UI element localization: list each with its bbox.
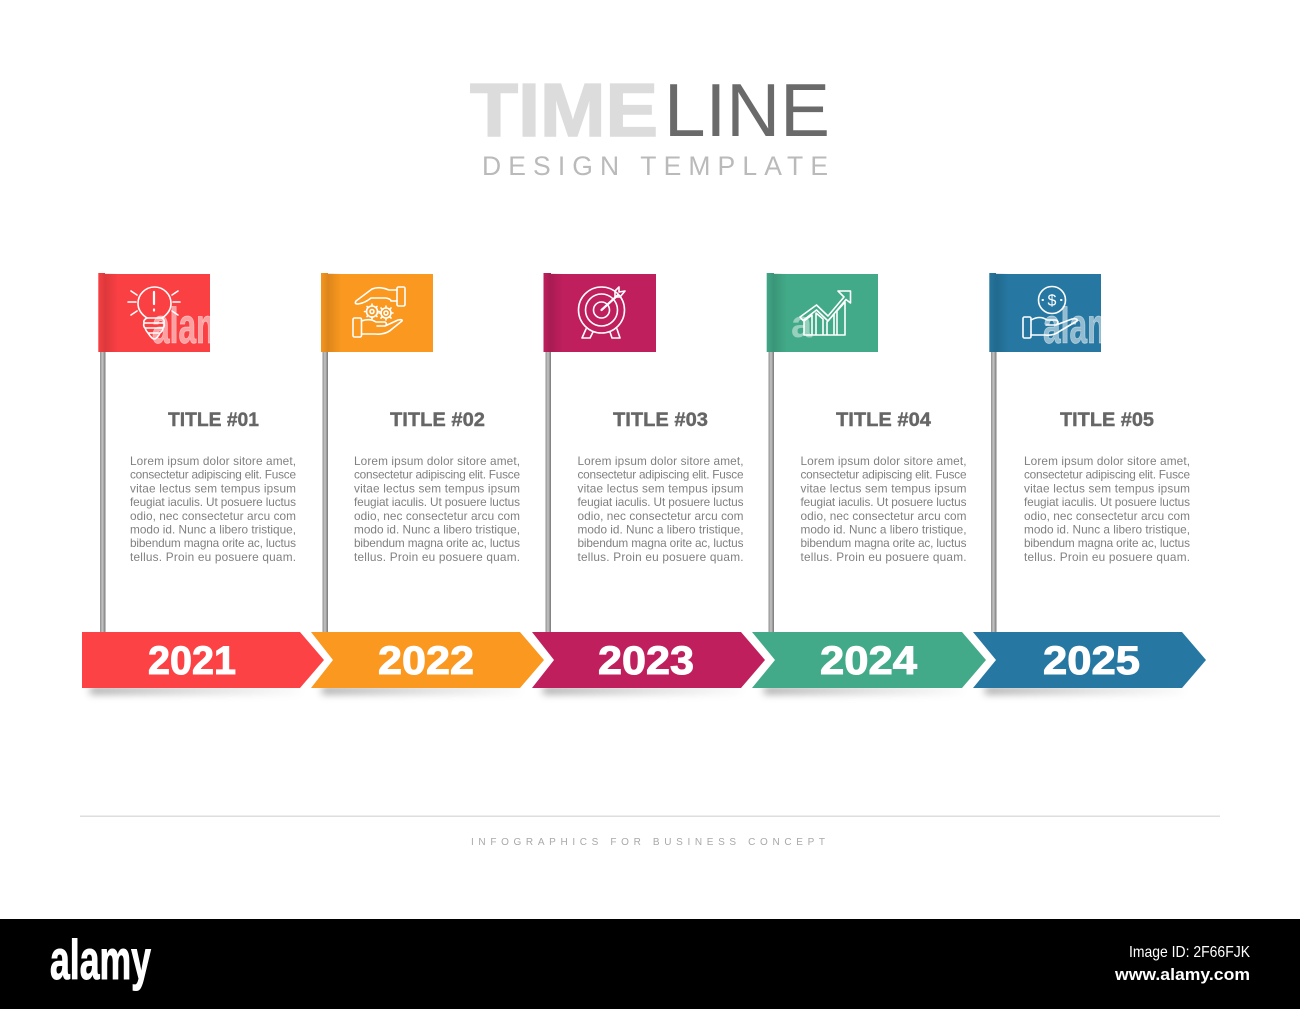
flag 2023 <box>544 273 656 352</box>
arrow: 2022: 2022 <box>378 639 474 683</box>
arrow: 2022 <box>311 632 544 688</box>
text block 02: vitae lectus sem tempus ipsum <box>354 481 520 495</box>
text block 02: tellus. Proin eu posuere quam. <box>354 550 520 564</box>
text block 04: vitae lectus sem tempus ipsum <box>800 481 967 495</box>
arrow: 2023: 2023 <box>598 639 694 683</box>
text block 02: consectetur adipiscing elit. Fusce <box>354 468 520 482</box>
text block 01: modo id. Nunc a libero tristique, <box>130 522 296 536</box>
text block 04: bibendum magna orite ac, luctus <box>800 536 967 550</box>
text block 04: odio, nec consectetur arcu com <box>800 509 967 523</box>
watermark fragment: alamy <box>1043 298 1133 354</box>
text block 03: vitae lectus sem tempus ipsum <box>578 481 744 495</box>
panel: 2024 <box>767 273 967 633</box>
text block 05: bibendum magna orite ac, luctus <box>1024 536 1190 550</box>
text block 02: odio, nec consectetur arcu com <box>354 509 520 523</box>
title: LINE <box>664 68 830 152</box>
text block 03: Lorem ipsum dolor sitore amet, <box>578 454 744 468</box>
text block 05: consectetur adipiscing elit. Fusce <box>1024 468 1190 482</box>
text block 01: consectetur adipiscing elit. Fusce <box>130 468 296 482</box>
text block 02: feugiat iaculis. Ut posuere luctus <box>354 495 520 509</box>
panel: 2021 <box>98 273 296 633</box>
title <box>470 68 830 152</box>
pole 2025 <box>991 350 996 633</box>
arrow: 2021 <box>82 632 324 688</box>
text block 03: feugiat iaculis. Ut posuere luctus <box>578 495 744 509</box>
website: www.alamy.com <box>1114 965 1250 984</box>
pole 2023 <box>546 350 551 633</box>
text block 02: Lorem ipsum dolor sitore amet, <box>354 454 520 468</box>
arrow: 2024: 2024 <box>820 639 918 683</box>
text block 04: tellus. Proin eu posuere quam. <box>800 550 966 564</box>
text block 02 <box>354 454 520 564</box>
footer caption: INFOGRAPHICS FOR BUSINESS CONCEPT <box>471 837 825 848</box>
watermark fragment: alamy <box>152 298 242 354</box>
text block 04 <box>800 454 967 564</box>
text block 05: vitae lectus sem tempus ipsum <box>1024 481 1190 495</box>
panel: 2023 <box>544 273 744 633</box>
footer bar <box>0 919 1300 1009</box>
title #05: TITLE #05 <box>1060 409 1154 431</box>
image id: Image ID: 2F66FJK <box>1129 944 1250 961</box>
text block 01: odio, nec consectetur arcu com <box>130 509 296 523</box>
text block 05: modo id. Nunc a libero tristique, <box>1024 522 1190 536</box>
icon: hands and gears <box>353 287 405 337</box>
text block 05: feugiat iaculis. Ut posuere luctus <box>1024 495 1190 509</box>
text block 03: bibendum magna orite ac, luctus <box>578 536 744 550</box>
text block 04: feugiat iaculis. Ut posuere luctus <box>800 495 967 509</box>
text block 03: consectetur adipiscing elit. Fusce <box>578 468 744 482</box>
arrow: 2021: 2021 <box>148 639 236 683</box>
text block 03: modo id. Nunc a libero tristique, <box>578 522 744 536</box>
flag 2022 <box>321 273 433 352</box>
text block 01: tellus. Proin eu posuere quam. <box>130 550 296 564</box>
text block 01: feugiat iaculis. Ut posuere luctus <box>130 495 296 509</box>
text block 01 <box>130 454 296 564</box>
title: TIME <box>470 68 658 152</box>
pole 2024 <box>768 350 774 633</box>
alamy logo: alamy <box>50 928 151 991</box>
text block 04: consectetur adipiscing elit. Fusce <box>800 468 967 482</box>
pole 2021 <box>100 350 106 633</box>
flag 2024 <box>767 273 878 352</box>
pole 2022 <box>322 350 328 633</box>
text block 03: tellus. Proin eu posuere quam. <box>578 550 744 564</box>
flag 2025 <box>989 273 1101 352</box>
text block 03: odio, nec consectetur arcu com <box>578 509 744 523</box>
text block 02: bibendum magna orite ac, luctus <box>354 536 520 550</box>
title #02: TITLE #02 <box>390 409 485 431</box>
arrow: 2024 <box>752 632 986 688</box>
icon: hand with coin: $ <box>1048 292 1057 310</box>
text block 05 <box>1024 454 1190 564</box>
text block 04: Lorem ipsum dolor sitore amet, <box>800 454 966 468</box>
text block 05: odio, nec consectetur arcu com <box>1024 509 1190 523</box>
text block 05: tellus. Proin eu posuere quam. <box>1024 550 1190 564</box>
icon: hand with coin <box>1023 286 1077 338</box>
subtitle: DESIGN TEMPLATE <box>482 151 828 181</box>
arrow: 2025 <box>973 632 1206 688</box>
text block 03 <box>578 454 744 564</box>
flag 2021 <box>98 273 210 352</box>
title #03: TITLE #03 <box>613 409 708 431</box>
icon: light bulb <box>128 287 180 339</box>
icon: growth chart <box>800 291 850 335</box>
arrow: 2023 <box>532 632 765 688</box>
text block 04: modo id. Nunc a libero tristique, <box>800 522 966 536</box>
title #01: TITLE #01 <box>168 409 259 431</box>
text block 02: modo id. Nunc a libero tristique, <box>354 522 520 536</box>
icon: target <box>578 287 625 338</box>
text block 05: Lorem ipsum dolor sitore amet, <box>1024 454 1190 468</box>
text block 01: vitae lectus sem tempus ipsum <box>130 481 296 495</box>
text block 01: bibendum magna orite ac, luctus <box>130 536 296 550</box>
panel: 2022 <box>321 273 520 633</box>
arrow shadows <box>90 687 1183 694</box>
watermark fragment: a <box>791 304 813 346</box>
title #04: TITLE #04 <box>836 409 931 431</box>
arrow: 2025: 2025 <box>1043 639 1140 683</box>
panel: 2025 <box>989 273 1190 633</box>
text block 01: Lorem ipsum dolor sitore amet, <box>130 454 296 468</box>
